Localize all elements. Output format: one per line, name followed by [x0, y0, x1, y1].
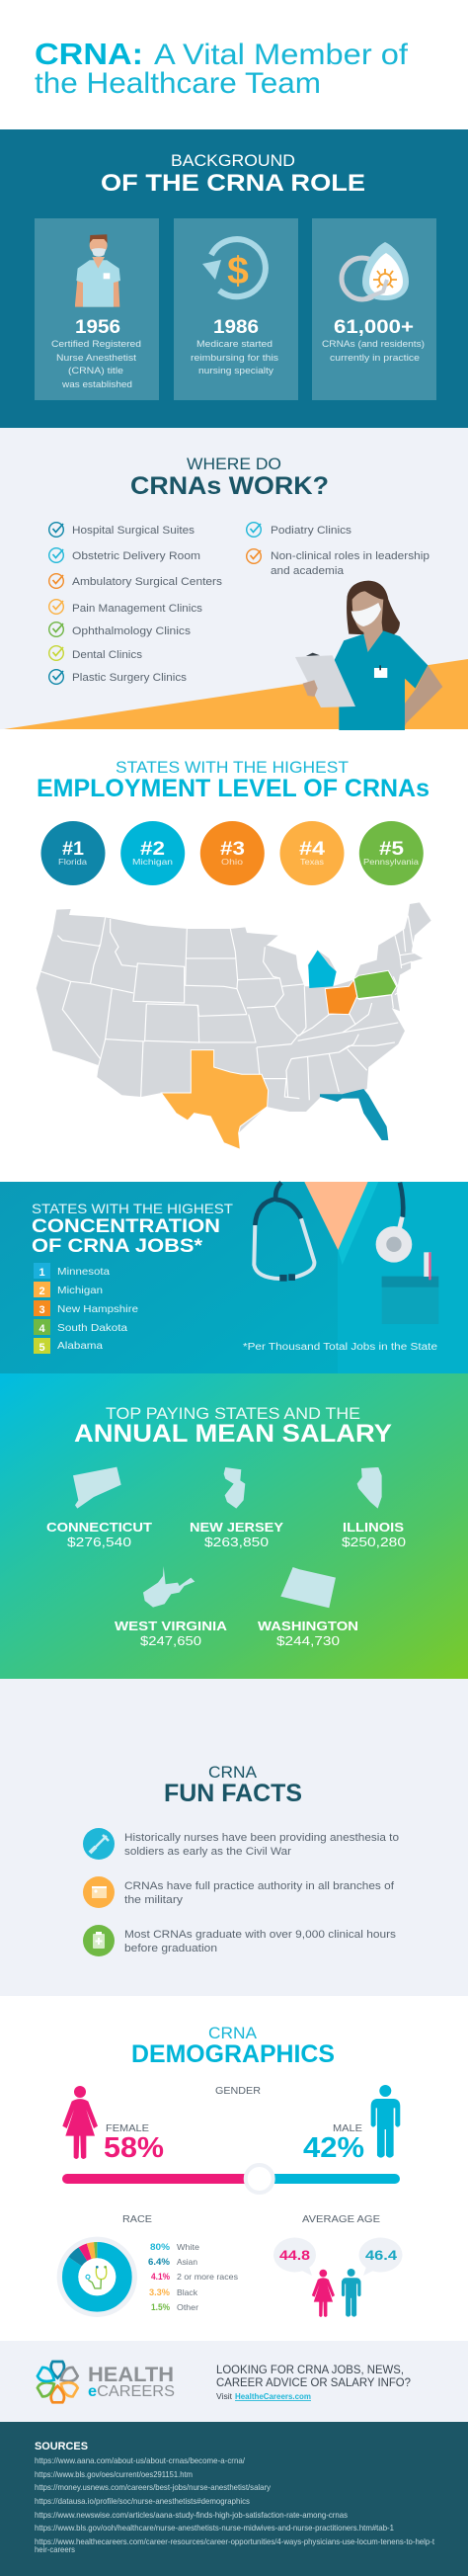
heading: sources: SOURCES — [35, 2441, 88, 2452]
source list: heir-careers — [35, 2544, 75, 2554]
checklist: left column: Obstetric Delivery Room — [72, 550, 200, 562]
text: medicare — [191, 339, 278, 376]
source list: https://money.usnews.com/careers/best-jobs/nurse-anesthetist/salary — [35, 2482, 272, 2492]
panel: employment level of CRNAs — [37, 758, 431, 1149]
text: title established: Certified Registered — [51, 339, 141, 350]
source list: https://www.healthecareers.com/career-resources/career-opportunities/4-ways-physicians-use-locum-tenens-to-help-t — [35, 2536, 435, 2546]
legend: race: Black — [177, 2287, 198, 2297]
speech bubble: female age: 44.8 — [279, 2247, 310, 2263]
heading: employment level: STATES WITH THE HIGHEST — [116, 758, 349, 777]
speech bubble: male age — [359, 2237, 403, 2276]
checklist: right column: Non-clinical roles in leadership — [271, 550, 429, 562]
checklist: left column — [49, 523, 223, 684]
icon: clipboard — [83, 1925, 115, 1956]
gender bar — [62, 2165, 400, 2193]
legend: race: 3.3% — [149, 2287, 171, 2298]
heading: employment level: EMPLOYMENT LEVEL OF CRNAs — [37, 775, 429, 802]
stat: male 42%: 42% — [303, 2132, 364, 2164]
salary: New Jersey: NEW JERSEY — [190, 1521, 284, 1535]
legend: race: 80% — [150, 2242, 171, 2253]
rank: Texas: #4 — [299, 839, 326, 860]
label: average age: AVERAGE AGE — [302, 2213, 380, 2225]
card: 61,000+ — [312, 218, 436, 400]
text: in practice: CRNAs (and residents) — [322, 339, 425, 350]
stat: female 58%: FEMALE — [106, 2122, 149, 2134]
rank: Florida — [41, 821, 105, 885]
panel: where do CRNAs work — [0, 428, 468, 730]
text: fact one: soldiers as early as the Civil War — [124, 1846, 291, 1858]
rank: Ohio: #3 — [220, 839, 245, 860]
checklist: left column: Dental Clinics — [72, 649, 143, 661]
salary: West Virginia: WEST VIRGINIA — [115, 1620, 227, 1633]
legend: race: 2 or more races — [177, 2272, 238, 2282]
heading: salary: TOP PAYING STATES AND THE — [106, 1404, 360, 1423]
salary: New Jersey — [190, 1521, 284, 1549]
text: medicare: Medicare started — [196, 339, 273, 350]
salary: Connecticut: $276,540 — [67, 1535, 131, 1549]
rank: Texas: Texas — [300, 857, 324, 867]
icon: small male — [342, 2269, 361, 2317]
state shapes — [73, 1467, 382, 1608]
legend: race: 4.1% — [151, 2272, 170, 2283]
title: the Healthcare Team — [35, 67, 321, 100]
salary: New Jersey: $263,850 — [204, 1535, 269, 1549]
legend: race: 1.5% — [151, 2302, 170, 2313]
rank: Michigan — [120, 821, 185, 885]
ranked list: states: New Hampshire — [57, 1303, 138, 1315]
text: medicare: reimbursing for this — [191, 353, 278, 364]
text: call to action — [216, 2365, 411, 2401]
speech bubble: female age — [273, 2237, 316, 2276]
text: call to action: HealtheCareers.com — [235, 2391, 311, 2401]
heading: fun facts: CRNA — [208, 1763, 258, 1782]
text: call to action: LOOKING FOR CRNA JOBS, NEWS, — [216, 2365, 404, 2376]
salary: West Virginia: $247,650 — [140, 1633, 201, 1648]
heading: concentration: OF CRNA JOBS* — [32, 1236, 203, 1257]
rank: Ohio — [200, 821, 265, 885]
panel: background of the CRNA role — [0, 129, 468, 428]
legend: race: 6.4% — [148, 2257, 171, 2268]
ranked list: states — [34, 1263, 138, 1354]
text: title established: Nurse Anesthetist — [56, 353, 136, 364]
source list: https://www.newswise.com/articles/aana-study-finds-high-job-satisfaction-rate-among-crnas — [35, 2510, 348, 2520]
ranked list: states: 4 — [39, 1323, 45, 1335]
text: call to action: CAREER ADVICE OR SALARY INFO? — [216, 2377, 411, 2389]
heading: background: OF THE CRNA ROLE — [101, 170, 365, 197]
checklist: left column: Pain Management Clinics — [72, 603, 203, 615]
text: fact one — [124, 1832, 399, 1858]
title: A Vital Member of — [154, 39, 409, 71]
map: United States — [37, 902, 431, 1149]
text: title established: was established — [61, 379, 132, 390]
text: fact two: the military — [124, 1894, 184, 1906]
panel: sources — [0, 2422, 468, 2576]
checklist: left column: Ophthalmology Clinics — [72, 625, 192, 637]
heading: where do CRNAs work: CRNAs WORK? — [130, 472, 329, 500]
ranked list: states: Alabama — [57, 1340, 103, 1352]
icon: small female — [312, 2270, 335, 2317]
rank: Ohio: Ohio — [221, 857, 243, 867]
card: 1956 — [35, 218, 159, 400]
stat: 61,000+: 61,000+ — [334, 317, 414, 338]
stat: male 42%: MALE — [333, 2122, 362, 2134]
panel: call to action — [0, 2341, 468, 2422]
panel: concentration of CRNA jobs — [0, 1182, 468, 1373]
source list: https://datausa.io/profile/soc/nurse-anesthetists#demographics — [35, 2496, 250, 2506]
speech bubble: male age: 46.4 — [365, 2247, 397, 2263]
heading: fun facts — [164, 1763, 302, 1807]
rank: Florida: Florida — [58, 857, 87, 867]
text: fact two — [124, 1880, 395, 1906]
title — [35, 37, 409, 100]
salary: Illinois — [342, 1521, 406, 1549]
text: fact three: before graduation — [124, 1943, 217, 1954]
label: gender: GENDER — [215, 2085, 261, 2097]
logo: Health eCareers: eCAREERS — [88, 2383, 175, 2400]
panel: annual mean salary — [0, 1373, 468, 1679]
heading: demographics: DEMOGRAPHICS — [131, 2040, 335, 2068]
logo: Health eCareers — [37, 2362, 175, 2402]
legend: race: White — [177, 2242, 199, 2252]
footnote: *Per Thousand Total Jobs in the State — [243, 1342, 438, 1353]
ranked list: states: Michigan — [57, 1285, 103, 1296]
checklist: right column: and academia — [271, 565, 345, 577]
state: Pennsylvania — [353, 970, 397, 999]
label: race: RACE — [122, 2213, 152, 2225]
rank: Pennsylvania — [359, 821, 424, 885]
icon: female figure — [62, 2086, 98, 2159]
text: fact three — [124, 1929, 397, 1954]
source list: https://www.aana.com/about-us/about-crnas/become-a-crna/ — [35, 2455, 246, 2465]
legend: race — [148, 2242, 238, 2313]
heading: background: BACKGROUND — [171, 152, 295, 170]
rank: Michigan: Michigan — [132, 857, 173, 867]
text: medicare: nursing specialty — [198, 366, 273, 376]
heading: salary — [74, 1404, 392, 1448]
heading: employment level — [37, 758, 429, 802]
illustration: scrubs and stethoscope — [254, 1182, 438, 1324]
ranked list: states: Minnesota — [57, 1266, 110, 1278]
text: fact one: Historically nurses have been providing anesthesia to — [124, 1832, 399, 1844]
icon: anesthesia mask — [342, 242, 409, 300]
state: Ohio — [325, 980, 357, 1015]
source list: https://www.bls.gov/oes/current/oes291151.htm — [35, 2469, 193, 2479]
chart: race donut — [57, 2237, 137, 2317]
icon: male figure — [371, 2085, 400, 2158]
heading: background — [101, 152, 365, 197]
checklist: right column — [247, 523, 429, 577]
panel: fun facts — [0, 1679, 468, 1996]
heading: where do CRNAs work — [130, 455, 329, 500]
rank: Pennsylvania: #5 — [379, 839, 405, 860]
text: in practice — [322, 339, 425, 364]
text: fact three: Most CRNAs graduate with over 9,000 clinical hours — [124, 1929, 397, 1941]
title: CRNA: — [35, 37, 143, 71]
text: in practice: currently in practice — [330, 353, 420, 364]
ranked list: states: 5 — [39, 1342, 45, 1354]
legend: race: Asian — [177, 2257, 197, 2267]
checklist: left column: Plastic Surgery Clinics — [72, 672, 188, 684]
checklist: right column: Podiatry Clinics — [271, 525, 352, 537]
salary: West Virginia — [115, 1620, 227, 1648]
heading: concentration — [32, 1201, 233, 1257]
heading: where do CRNAs work: WHERE DO — [187, 455, 281, 473]
heading: fun facts: FUN FACTS — [164, 1780, 302, 1807]
rank: Texas — [280, 821, 344, 885]
stat: 1956: 1956 — [75, 317, 120, 338]
salary: Washington — [258, 1620, 358, 1648]
state: Michigan — [308, 951, 337, 988]
salary: Connecticut — [46, 1521, 152, 1549]
icon: dollar with circular arrow: $ — [227, 250, 249, 292]
text: title established: (CRNA) title — [68, 366, 123, 376]
salary: Washington: WASHINGTON — [258, 1620, 358, 1633]
icon: syringe — [83, 1828, 115, 1860]
state: Florida — [320, 1089, 388, 1140]
logo: Health eCareers: HEALTH — [88, 2364, 174, 2386]
stat: female 58%: 58% — [104, 2132, 164, 2164]
heading: concentration: STATES WITH THE HIGHEST — [32, 1201, 233, 1216]
salary: Washington: $244,730 — [276, 1633, 340, 1648]
panel: demographics — [57, 2024, 403, 2317]
heading: concentration: CONCENTRATION — [32, 1216, 220, 1237]
legend: race: Other — [177, 2302, 198, 2312]
source list — [35, 2455, 435, 2554]
text: title established — [51, 339, 141, 390]
ranked list: states: 2 — [39, 1286, 45, 1297]
heading: demographics: CRNA — [208, 2024, 258, 2042]
card: 1986 — [174, 218, 298, 400]
icon: id card — [83, 1876, 115, 1908]
stat: 1986: 1986 — [213, 317, 259, 338]
rank: Michigan: #2 — [140, 839, 165, 860]
checklist: left column: Ambulatory Surgical Centers — [72, 576, 223, 588]
checklist: left column: Hospital Surgical Suites — [72, 525, 195, 537]
salary: Illinois: $250,280 — [342, 1535, 406, 1549]
rank: Florida: #1 — [62, 839, 84, 860]
salary: Connecticut: CONNECTICUT — [46, 1521, 152, 1535]
ranked list: states: South Dakota — [57, 1322, 127, 1334]
state: Texas — [161, 1050, 269, 1149]
text: call to action: Visit — [216, 2391, 233, 2401]
ranked list: states: 1 — [39, 1267, 45, 1279]
rank: Pennsylvania: Pennsylvania — [363, 857, 419, 867]
ranked list: states: 3 — [39, 1304, 45, 1316]
icon: dollar with circular arrow — [202, 239, 266, 296]
heading: salary: ANNUAL MEAN SALARY — [74, 1420, 392, 1448]
logo mark — [37, 2362, 79, 2402]
illustration: female nurse with clipboard — [295, 581, 442, 730]
heading: demographics — [131, 2024, 335, 2068]
source list: https://www.bls.gov/ooh/healthcare/nurse-anesthetists-nurse-midwives-and-nurse-practitioners.htm#tab-1 — [35, 2523, 394, 2533]
icon: male nurse — [75, 234, 120, 307]
salary: Illinois: ILLINOIS — [343, 1521, 404, 1535]
text: fact two: CRNAs have full practice authority in all branches of — [124, 1880, 395, 1892]
